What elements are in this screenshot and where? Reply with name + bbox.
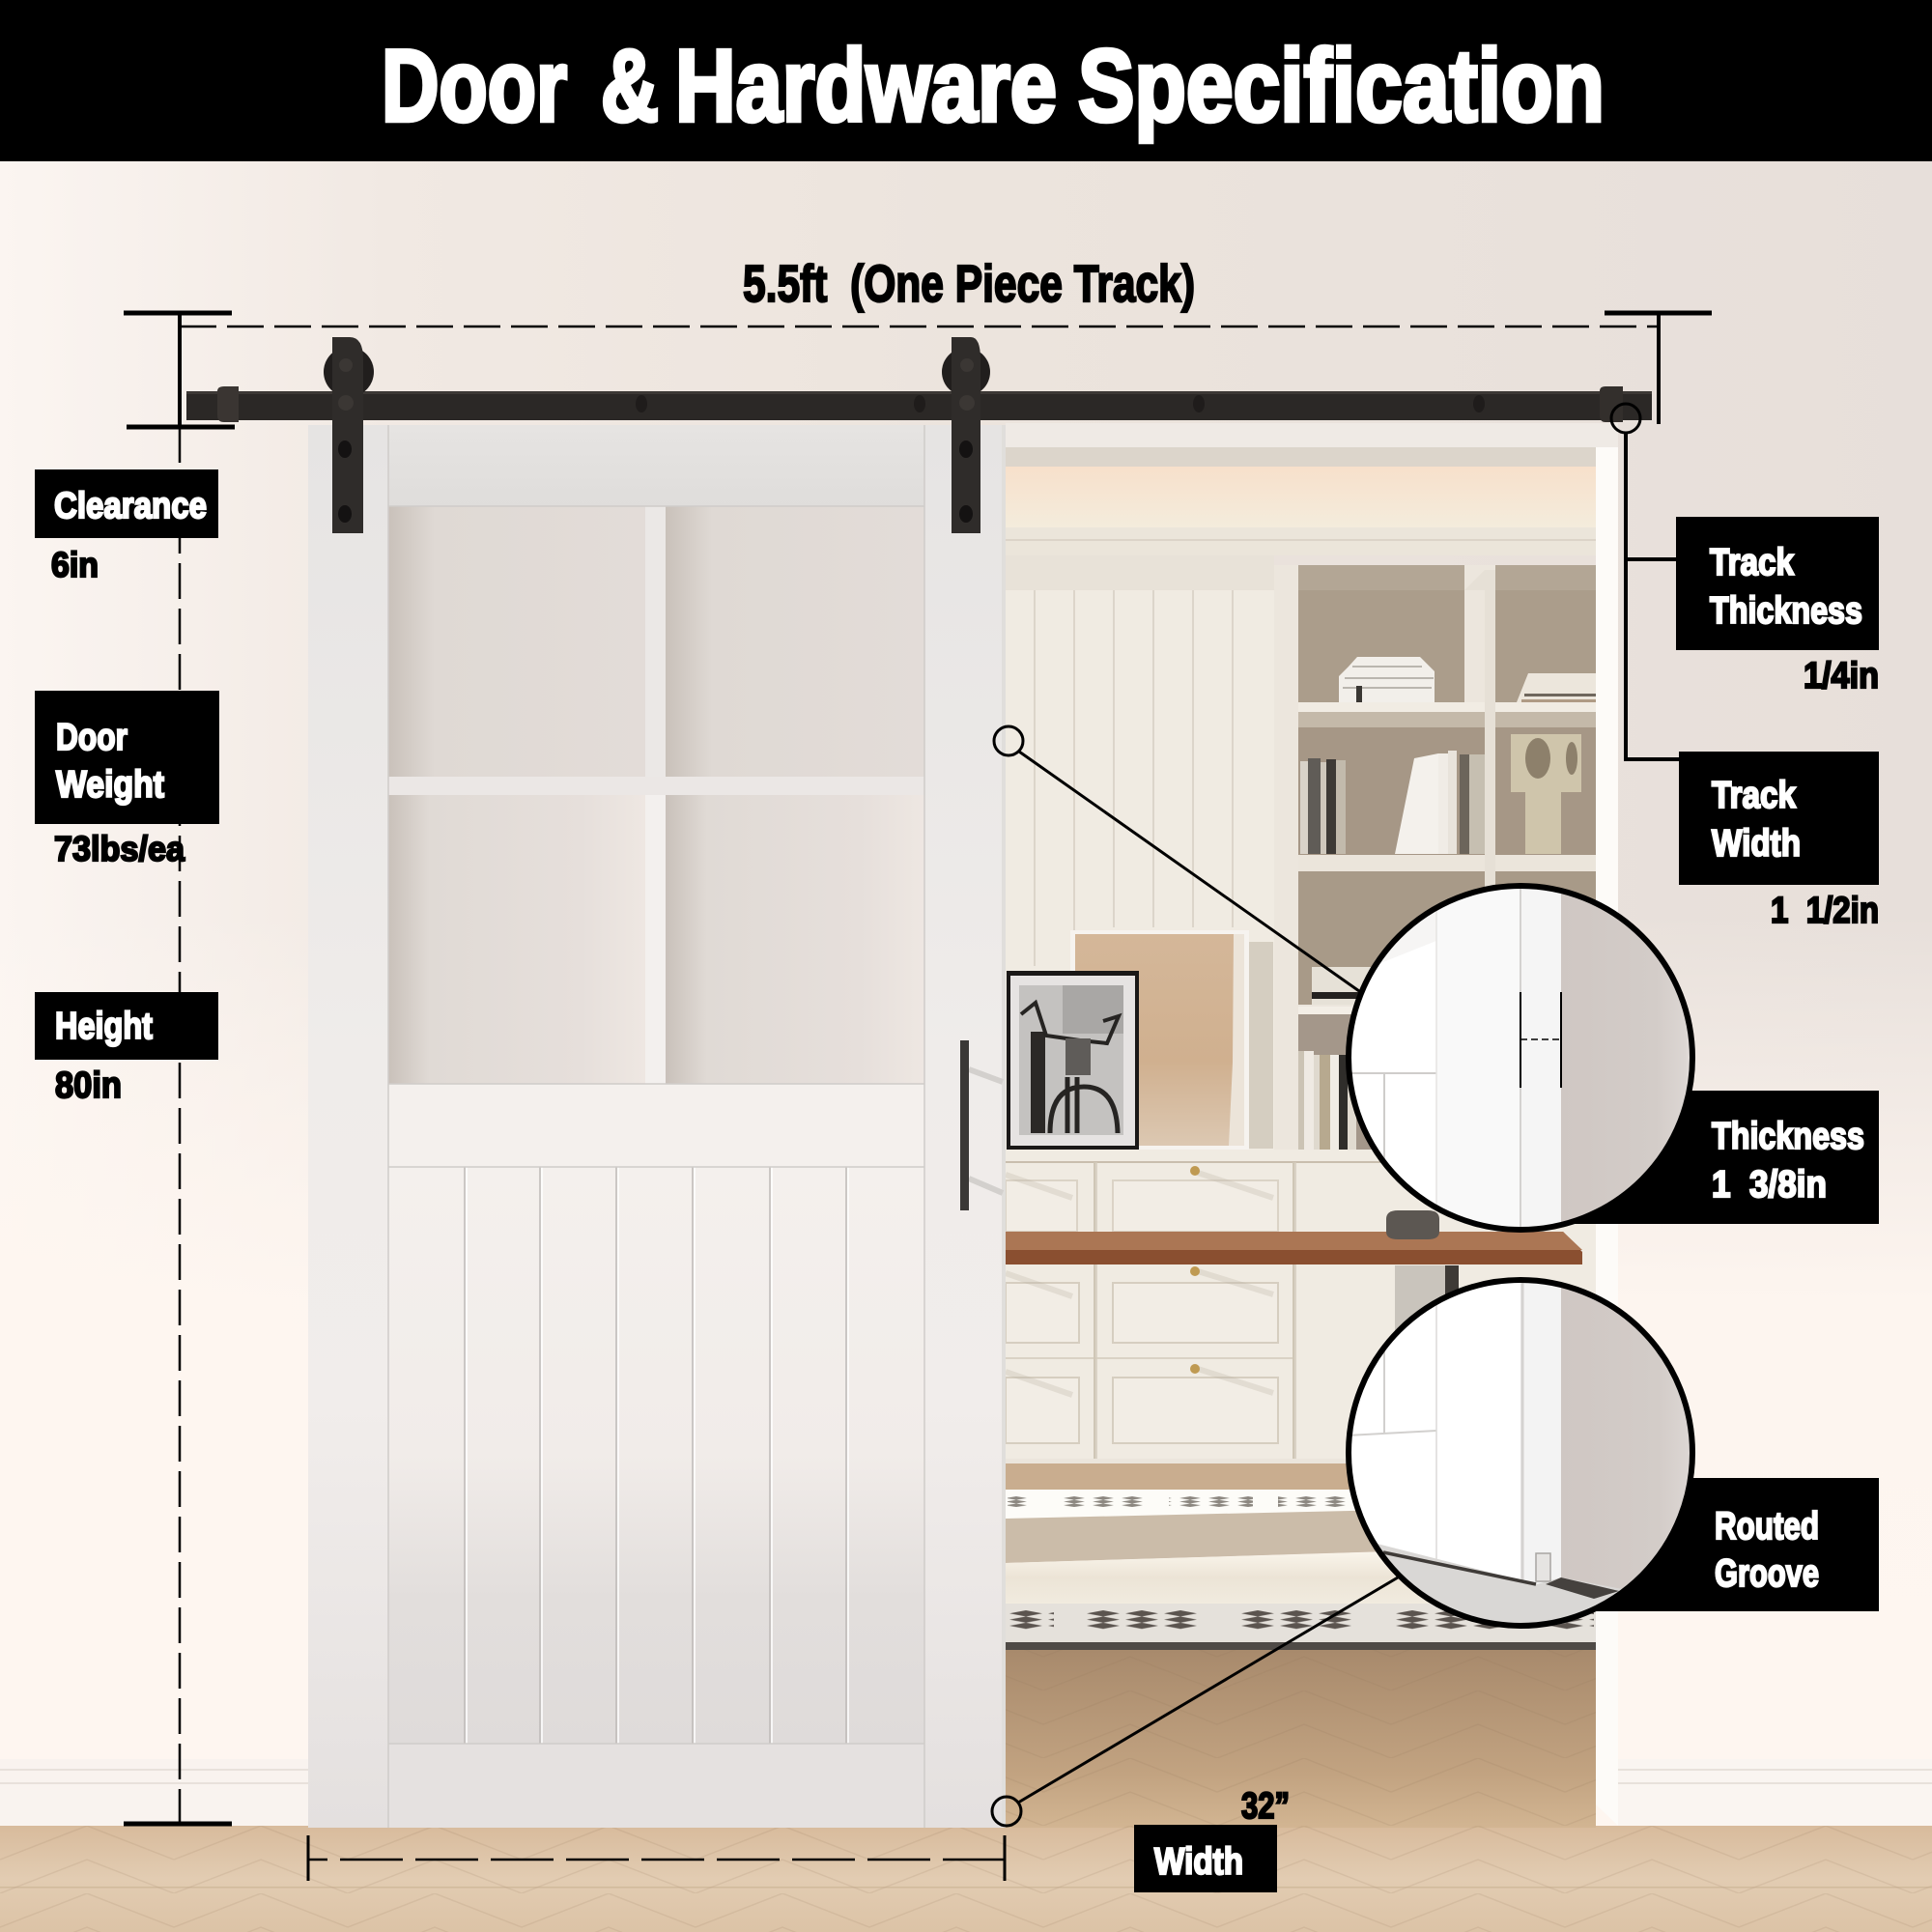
barn door [308, 425, 1006, 1828]
header band [0, 0, 1932, 161]
value: track thickness: 1/4in [1804, 656, 1879, 696]
callout box: routed groove [1546, 1478, 1879, 1611]
dimension: door width [308, 1835, 1005, 1881]
title [382, 29, 1605, 143]
label: routed groove: Routed [1715, 1505, 1819, 1548]
door frame right [1596, 447, 1618, 1826]
ceiling cove light [1006, 467, 1596, 527]
cabinets and table [1006, 1150, 1596, 1460]
magnifier: routed groove [1347, 1279, 1700, 1642]
floor [0, 1826, 1932, 1932]
value: width: 32” [1241, 1786, 1290, 1827]
groove lines [465, 1167, 846, 1744]
label: width [1134, 1825, 1277, 1892]
plank panel [388, 1167, 924, 1744]
crown moulding [1006, 527, 1596, 555]
label: thickness [1712, 1116, 1864, 1206]
sculpture [1511, 734, 1581, 854]
leader: thickness [994, 726, 1359, 991]
label: clearance: Clearance [54, 486, 207, 526]
label: track thickness [1676, 517, 1879, 650]
label: clearance [35, 469, 218, 538]
leader: track callouts [1611, 404, 1679, 759]
callout box: thickness [1546, 1091, 1879, 1224]
right roller hanger [942, 337, 990, 533]
sliding track [186, 386, 1652, 422]
label: width: Width [1154, 1841, 1243, 1883]
doorway interior scene [1006, 423, 1618, 1828]
door handle [960, 1040, 1003, 1210]
label: door weight: Weight [56, 764, 164, 806]
bookshelf [1274, 565, 1596, 1164]
floor, rug [1006, 1459, 1596, 1828]
baseboards [0, 1759, 1932, 1827]
label: thickness: Thickness [1712, 1116, 1864, 1157]
title: Hardware [675, 29, 1057, 143]
label: track width: Width [1712, 823, 1801, 865]
value: clearance: 6in [51, 545, 99, 584]
track length label: 5.5ft (One Piece Track) [743, 255, 1195, 313]
thickness dimension [1520, 992, 1561, 1088]
left roller hanger [324, 337, 374, 533]
title: & [601, 29, 659, 143]
title: Specification [1078, 29, 1605, 143]
label: track width: Track [1712, 775, 1796, 816]
track bolts [636, 395, 1485, 412]
dimension: door height [124, 427, 232, 1824]
label: height: Height [55, 1006, 153, 1047]
title: Door [382, 29, 567, 143]
label: track thickness: Track [1710, 542, 1794, 583]
value: height: 80in [55, 1065, 122, 1106]
books [1339, 657, 1435, 702]
label: routed groove [1715, 1505, 1819, 1595]
label: track width [1679, 752, 1879, 885]
rails and mullions [388, 425, 924, 506]
value: door weight: 73lbs/ea [54, 829, 185, 868]
groove notch [1536, 1553, 1550, 1581]
label: door weight [35, 691, 219, 824]
dimension: track length [124, 313, 1712, 427]
label: height [35, 992, 218, 1060]
glass panes [388, 506, 645, 777]
leader: routed groove [992, 1577, 1398, 1826]
label: thickness: 1 3/8in [1712, 1164, 1827, 1206]
magnifier: door thickness [1347, 884, 1696, 1236]
beadboard wall [1006, 555, 1274, 1174]
end stops [217, 386, 239, 422]
framed pictures [1007, 930, 1273, 1150]
label: door weight: Door [56, 717, 128, 758]
lower shelf books [1312, 967, 1372, 1005]
label: track thickness: Thickness [1710, 590, 1862, 632]
value: track width: 1 1/2in [1771, 891, 1879, 931]
header soffit [1006, 423, 1618, 448]
label: routed groove: Groove [1715, 1552, 1819, 1595]
